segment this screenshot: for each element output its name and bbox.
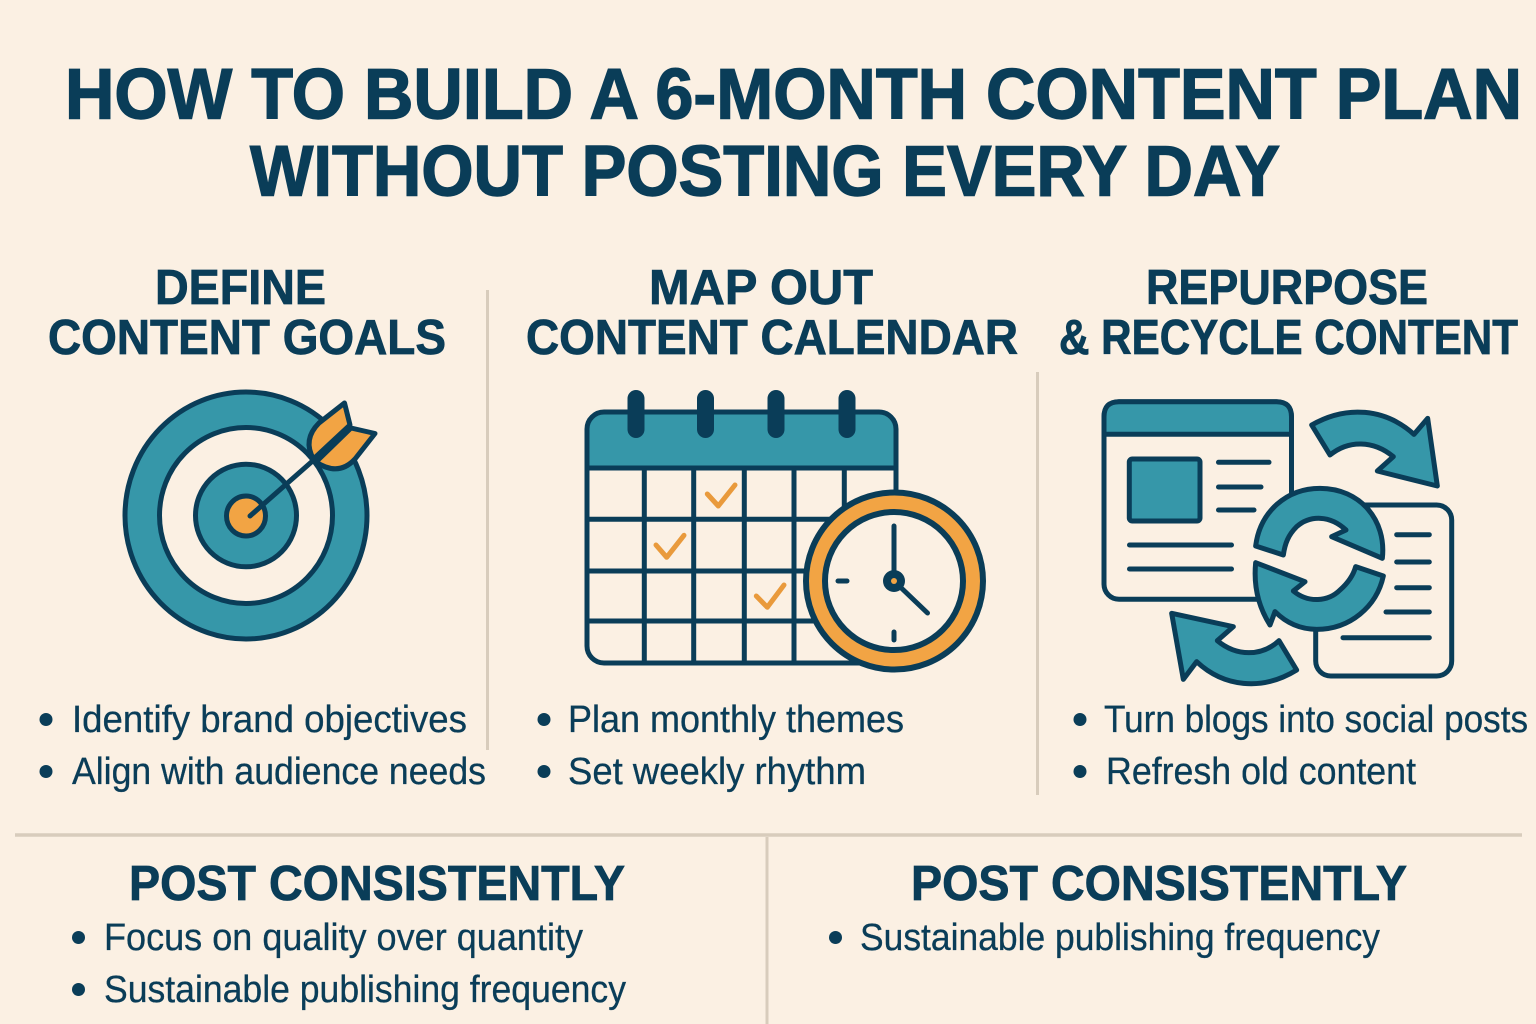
panel: map out content calendar bbox=[526, 260, 1018, 793]
heading: post consistently: POST CONSISTENTLY bbox=[911, 856, 1407, 911]
bullet list: post consistently left bbox=[72, 917, 626, 1011]
panel: post consistently right bbox=[829, 856, 1407, 959]
heading: post consistently: POST CONSISTENTLY bbox=[129, 856, 625, 911]
bullet list: calendar: Plan monthly themes bbox=[568, 699, 904, 741]
panel: post consistently left bbox=[72, 856, 626, 1011]
icon: documents with recycle arrows bbox=[1104, 402, 1452, 684]
bullet list: goals bbox=[40, 699, 486, 793]
bullet list: calendar: Set weekly rhythm bbox=[568, 751, 866, 793]
title: HOW TO BUILD A 6-MONTH CONTENT PLAN bbox=[65, 56, 1522, 134]
bullet list: post consistently left: Sustainable publishing frequency bbox=[104, 969, 626, 1011]
heading: define content goals: DEFINE bbox=[155, 260, 326, 315]
heading: define content goals: CONTENT GOALS bbox=[48, 310, 446, 365]
heading: map out content calendar: MAP OUT bbox=[649, 260, 873, 315]
heading: map out content calendar bbox=[526, 260, 1018, 365]
panel: repurpose and recycle content bbox=[1059, 260, 1528, 793]
title bbox=[65, 56, 1522, 212]
bullet list: goals: Align with audience needs bbox=[72, 751, 486, 793]
title: WITHOUT POSTING EVERY DAY bbox=[250, 132, 1280, 212]
bullet list: repurpose: Refresh old content bbox=[1106, 751, 1416, 793]
heading: define content goals bbox=[48, 260, 446, 365]
bullet list: goals: Identify brand objectives bbox=[72, 699, 467, 741]
icon: calendar with clock bbox=[587, 390, 983, 670]
heading: repurpose and recycle content: REPURPOSE bbox=[1146, 260, 1428, 315]
bullet list: repurpose bbox=[1074, 699, 1528, 793]
bullet list: post consistently left: Focus on quality over quantity bbox=[104, 917, 583, 959]
bullet list: post consistently right: Sustainable publishing frequency bbox=[860, 917, 1380, 959]
panel: define content goals bbox=[40, 260, 486, 793]
divider lines bbox=[15, 290, 1522, 1024]
bullet list: calendar bbox=[538, 699, 904, 793]
icon: target with arrow bbox=[125, 392, 375, 639]
heading: repurpose and recycle content bbox=[1059, 260, 1518, 365]
heading: map out content calendar: CONTENT CALENDAR bbox=[526, 310, 1018, 365]
